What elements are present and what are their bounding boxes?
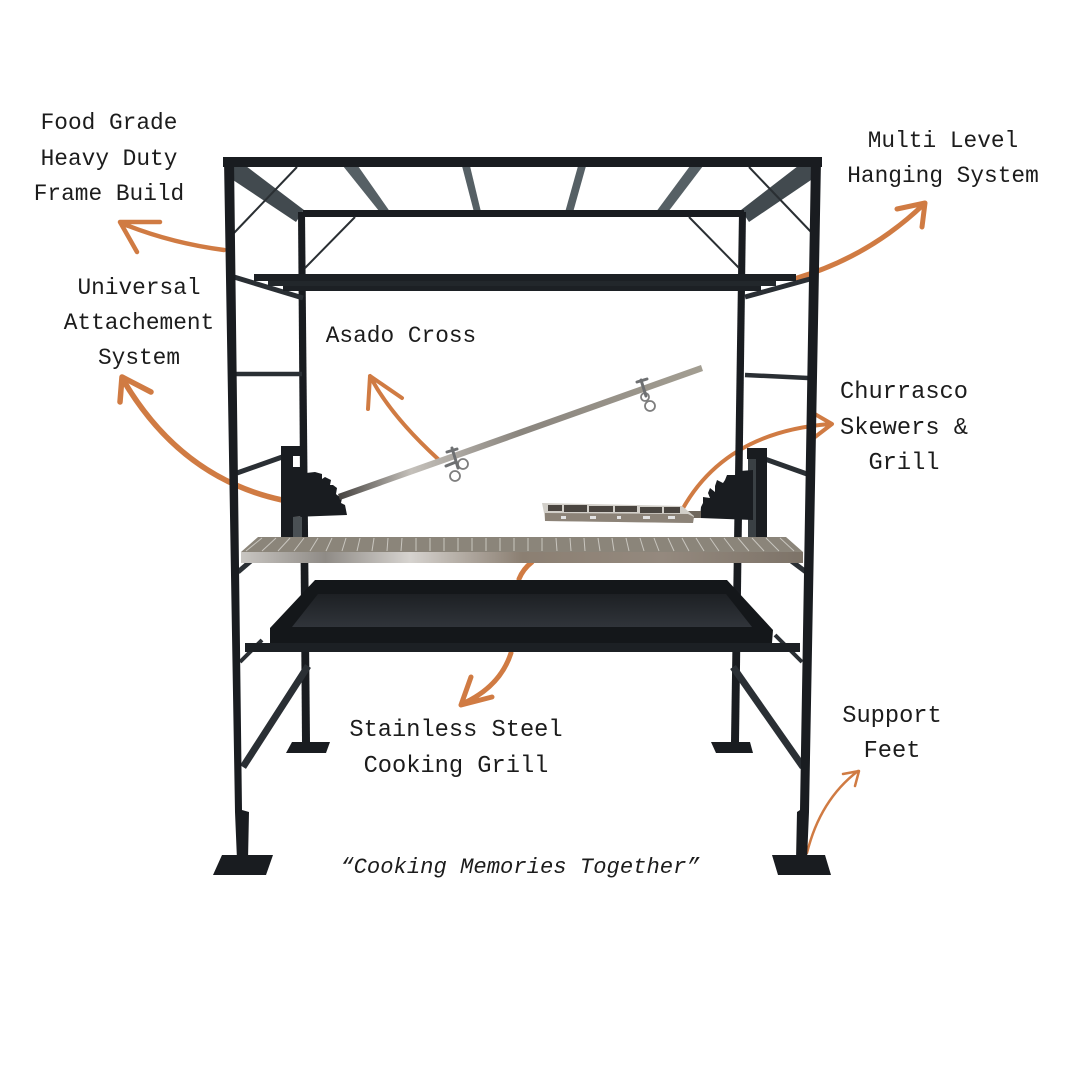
label: frame build: Frame Build (34, 181, 184, 207)
arrow: asado cross (368, 376, 438, 459)
front left post (224, 160, 249, 860)
label: stainless grill: Stainless Steel (349, 717, 563, 744)
arrow: stainless grill (461, 562, 532, 705)
label: stainless grill: Cooking Grill (364, 753, 548, 780)
left bracket and notched quadrant (281, 446, 347, 537)
label: universal attachment: Attachement (64, 310, 214, 336)
feet (213, 742, 831, 875)
label: hanging system: Multi Level (868, 128, 1018, 154)
label: support feet: Feet (864, 738, 920, 765)
arrows behind the frame (120, 203, 925, 853)
label: churrasco skewers: Skewers & (840, 415, 968, 442)
arrow: frame build (120, 222, 224, 252)
stainless cooking grill (241, 537, 803, 563)
label: support feet: Support (842, 703, 942, 730)
arrow: support feet (807, 771, 859, 853)
arrow: hanging system (797, 203, 925, 278)
top bar (223, 157, 822, 167)
right bracket and notched quadrant (700, 448, 767, 537)
label: universal attachment: System (98, 345, 180, 371)
roof slats (233, 166, 811, 222)
skewer rack (542, 503, 701, 523)
pan shelf (245, 643, 800, 652)
drip pan (270, 580, 773, 643)
front right post (796, 160, 821, 860)
asado cross bar (338, 365, 703, 500)
label: churrasco skewers: Churrasco (840, 379, 968, 406)
label: frame build: Heavy Duty (41, 146, 177, 172)
upper hanging rack (254, 274, 796, 291)
label: hanging system: Hanging System (847, 163, 1039, 189)
grill frame illustration (213, 157, 831, 875)
side braces (234, 277, 810, 767)
tension rods (234, 167, 812, 268)
clamps and rings (446, 379, 655, 481)
arrow: churrasco skewers (682, 413, 832, 510)
label: universal attachment: Universal (77, 275, 201, 301)
label: asado cross: Asado Cross (326, 323, 476, 349)
label: frame build: Food Grade (41, 110, 177, 136)
rear posts (298, 210, 746, 742)
label: churrasco skewers: Grill (868, 450, 940, 477)
arrow: universal attachment (120, 377, 282, 500)
tagline: “Cooking Memories Together” (340, 855, 700, 880)
